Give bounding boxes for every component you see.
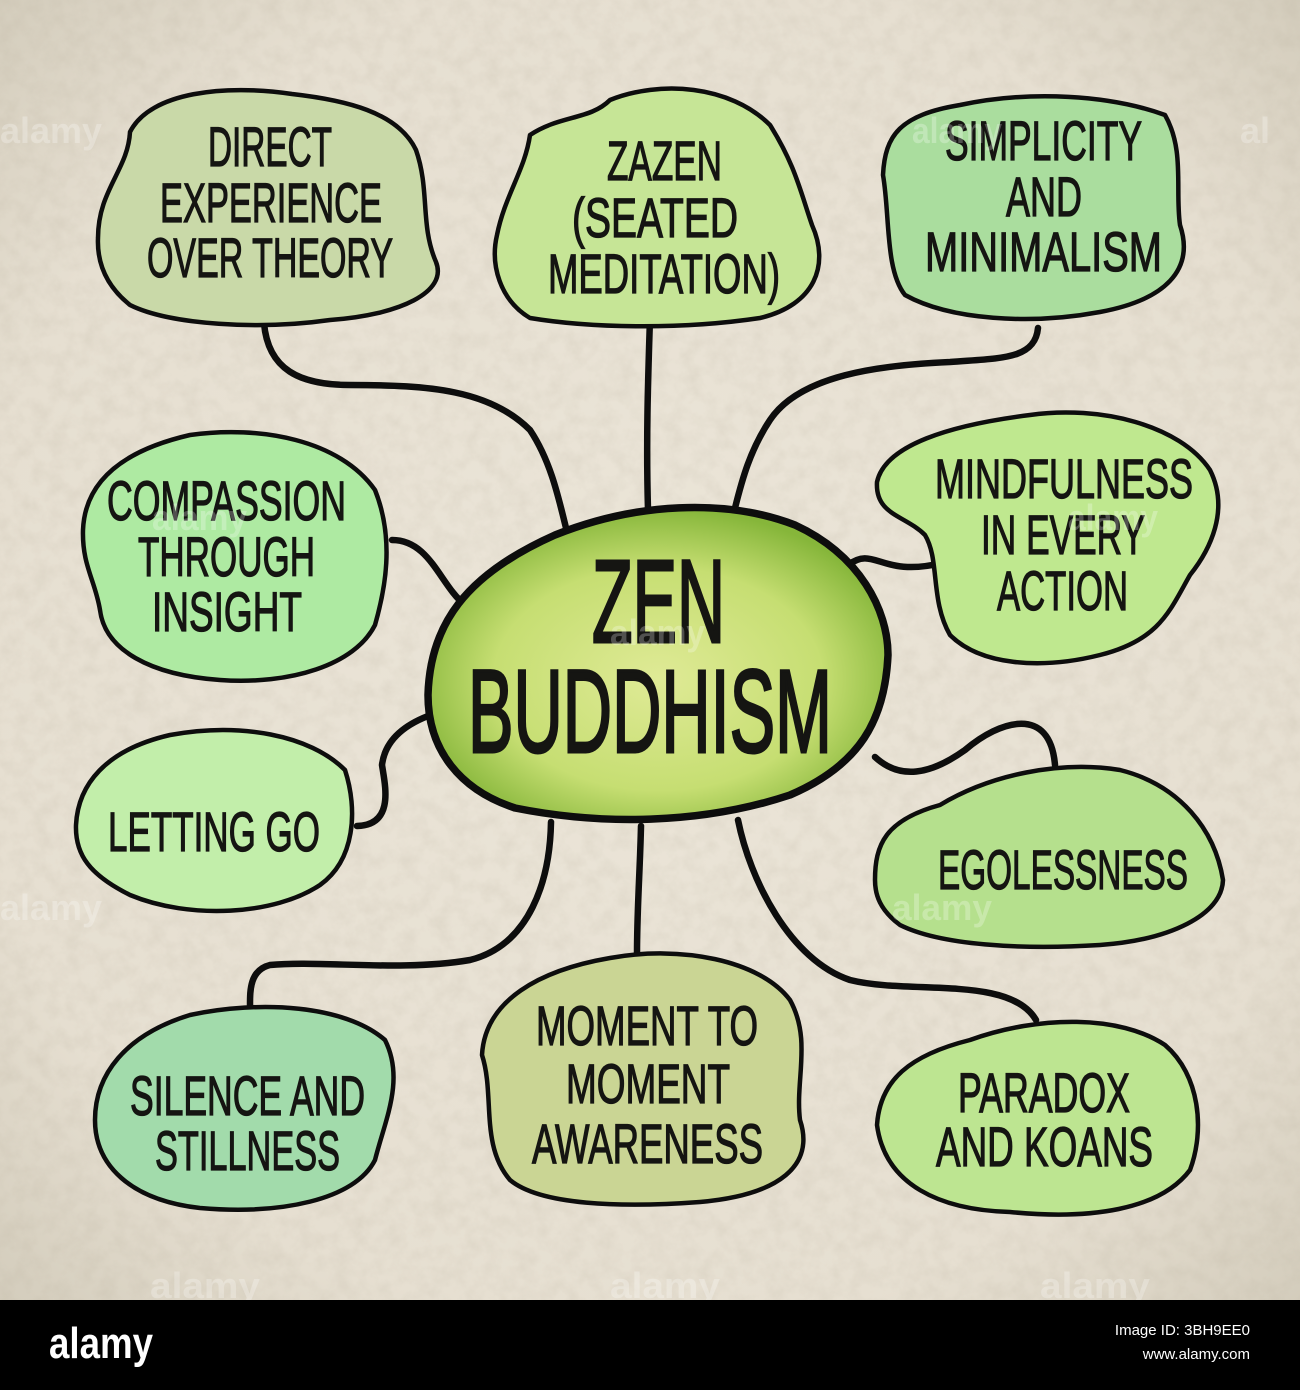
node: moment to moment awareness: AWARENESS xyxy=(532,1112,763,1175)
node: compassion through insight: INSIGHT xyxy=(152,580,302,643)
node: mindfulness in every action: ACTION xyxy=(997,559,1128,622)
node: zazen: ZAZEN xyxy=(607,129,722,192)
node: moment to moment awareness xyxy=(482,953,803,1205)
stock watermarks: alamy xyxy=(150,1265,260,1306)
connectors xyxy=(250,318,1055,1020)
node: direct experience over theory: EXPERIENCE xyxy=(160,171,382,234)
node: simplicity and minimalism: MINIMALISM xyxy=(925,220,1162,283)
node: zazen: MEDITATION) xyxy=(548,242,780,305)
node: paradox and koans xyxy=(877,1022,1198,1215)
node: zazen: (SEATED xyxy=(572,186,738,249)
stock watermarks: alamy xyxy=(0,887,102,928)
node: direct experience over theory xyxy=(98,90,438,325)
stock watermarks: alamy xyxy=(912,110,1002,151)
stock watermarks: alamy xyxy=(0,110,102,151)
image id: Image ID: 3BH9EE0 xyxy=(1115,1322,1250,1339)
node: silence and stillness xyxy=(95,1007,394,1210)
node: direct experience over theory: OVER THEORY xyxy=(147,226,393,289)
node: simplicity and minimalism xyxy=(883,96,1184,319)
stock watermarks: alamy xyxy=(610,612,705,653)
footer bar xyxy=(0,1300,1300,1390)
node: paradox and koans: AND KOANS xyxy=(936,1115,1153,1178)
stock watermarks: alamy xyxy=(892,887,992,928)
node: silence and stillness: STILLNESS xyxy=(155,1119,340,1182)
central node: zen buddhism: ZEN xyxy=(592,536,725,668)
alamy logo: alamy xyxy=(49,1319,153,1368)
node: mindfulness in every action xyxy=(877,412,1218,663)
node: letting go: LETTING GO xyxy=(108,800,320,863)
node: mindfulness in every action: IN EVERY xyxy=(981,503,1145,566)
central node: zen buddhism: BUDDHISM xyxy=(468,646,832,778)
website: www.alamy.com xyxy=(1142,1346,1250,1363)
stock watermarks: al xyxy=(1240,110,1270,151)
node: letting go xyxy=(76,730,352,911)
node: direct experience over theory: DIRECT xyxy=(208,115,332,178)
node: compassion through insight: COMPASSION xyxy=(107,469,346,532)
node: egolessness xyxy=(875,767,1223,947)
central node: zen buddhism xyxy=(428,508,888,819)
node: simplicity and minimalism: AND xyxy=(1006,165,1082,228)
node: compassion through insight: THROUGH xyxy=(138,525,315,588)
stock watermarks: alamy xyxy=(1040,1265,1150,1306)
stock watermarks: alamy xyxy=(1068,497,1158,538)
node: simplicity and minimalism: SIMPLICITY xyxy=(945,109,1142,172)
node: moment to moment awareness: MOMENT xyxy=(566,1052,730,1115)
node: moment to moment awareness: MOMENT TO xyxy=(536,994,758,1057)
stock watermarks: alamy xyxy=(152,497,247,538)
node: silence and stillness: SILENCE AND xyxy=(130,1064,365,1127)
node: compassion through insight xyxy=(83,432,387,681)
node: zazen xyxy=(495,89,819,326)
stock watermarks: alamy xyxy=(610,1265,720,1306)
node: paradox and koans: PARADOX xyxy=(958,1061,1130,1124)
